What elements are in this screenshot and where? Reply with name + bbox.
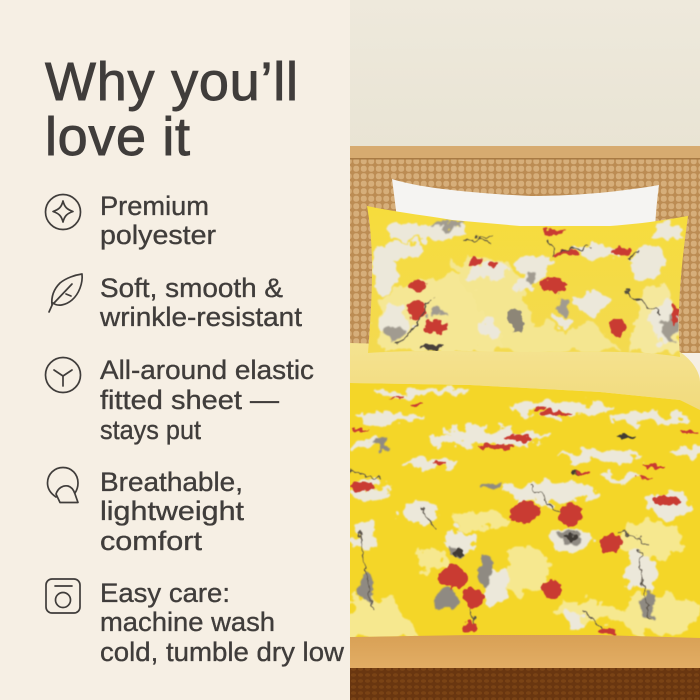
- text: premium polyester: [100, 191, 216, 250]
- icon: sparkle in circle: [46, 194, 80, 230]
- title: Why you’ll: [45, 52, 298, 112]
- text: easy care: [100, 578, 345, 667]
- icon: feather: [49, 274, 82, 312]
- text: elastic fitted sheet: All-around elastic: [100, 355, 314, 385]
- text: premium polyester: polyester: [100, 220, 216, 250]
- text: elastic fitted sheet: [100, 355, 314, 445]
- text: breathable lightweight comfort: [100, 467, 245, 556]
- text: elastic fitted sheet: stays put: [100, 415, 202, 445]
- feature: soft and smooth: [49, 273, 303, 332]
- text: soft smooth wrinkle-resistant: wrinkle-resistant: [99, 302, 303, 332]
- text: breathable lightweight comfort: Breathable,: [100, 467, 243, 497]
- text: breathable lightweight comfort: comfort: [100, 526, 203, 556]
- fitted sheet: [350, 343, 700, 412]
- wall: [350, 0, 700, 148]
- patterned duvet: [347, 383, 700, 640]
- feature: elastic fitted sheet: [46, 355, 314, 445]
- text: easy care: machine wash: [100, 607, 275, 637]
- text: breathable lightweight comfort: lightweight: [100, 496, 245, 526]
- text: soft smooth wrinkle-resistant: Soft, smooth &: [100, 273, 283, 303]
- floor: [350, 668, 700, 700]
- white pillow: [392, 179, 659, 228]
- left text panel background: [0, 0, 350, 700]
- icon: Y in circle: [46, 358, 80, 392]
- bed frame: [350, 634, 700, 668]
- text: soft smooth wrinkle-resistant: [99, 273, 303, 332]
- headboard: [350, 146, 700, 353]
- title: [45, 52, 298, 167]
- icon: washing machine: [46, 579, 80, 613]
- text: elastic fitted sheet: fitted sheet —: [100, 385, 280, 415]
- photo: yellow floral bedding: [347, 0, 700, 700]
- title: love it: [45, 107, 190, 167]
- text: easy care: cold, tumble dry low: [100, 637, 345, 667]
- feature: premium polyester: [46, 191, 216, 250]
- icon: circle with leaf: [48, 468, 78, 502]
- text: premium polyester: Premium: [100, 191, 209, 221]
- feature: breathable: [48, 467, 245, 556]
- patterned pillow: [367, 206, 688, 357]
- text: easy care: Easy care:: [100, 578, 230, 608]
- feature: easy care: [46, 578, 345, 667]
